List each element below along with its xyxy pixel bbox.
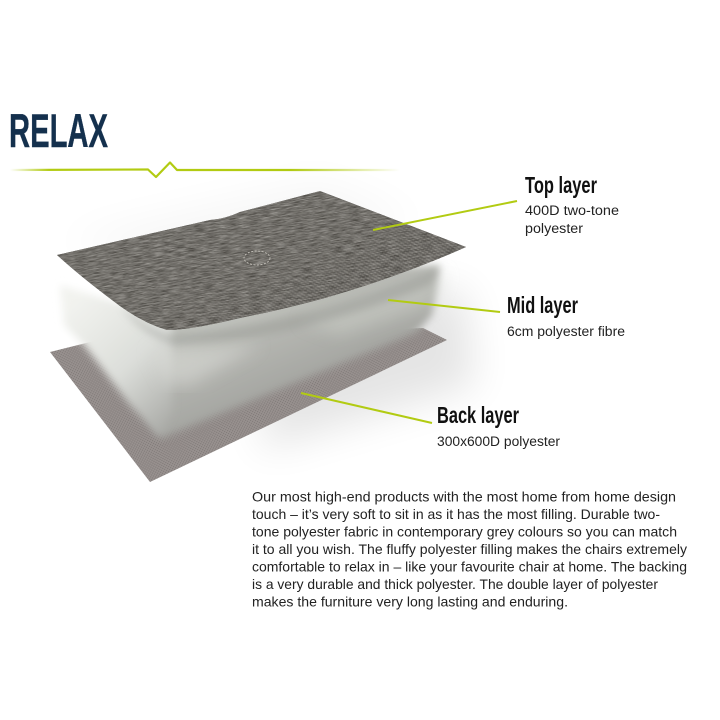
leader line: back layer [301, 393, 432, 423]
description text: Our most high-end products with the most home from home design [252, 490, 676, 505]
label: top layer: Top layer [525, 172, 597, 198]
title: RELAX [9, 104, 108, 157]
label: back layer: Back layer [437, 402, 519, 428]
layered material illustration [50, 191, 466, 482]
top layer stitched circle [244, 251, 270, 265]
shadow beneath top layer [120, 268, 440, 345]
label: top layer: 400D two-tone [525, 203, 619, 218]
label: mid layer: 6cm polyester fibre [507, 324, 625, 339]
label: top layer [525, 172, 619, 236]
description text: makes the furniture very long lasting and enduring. [252, 595, 568, 610]
label: mid layer: Mid layer [507, 292, 578, 318]
leader line: top layer [373, 201, 517, 230]
description text: it to all you wish. The fluffy polyester filling makes the chairs extremely [252, 542, 687, 557]
description text: comfortable to relax in – like your favourite chair at home. The backing [252, 560, 687, 575]
label: back layer [437, 402, 561, 449]
label: mid layer [507, 292, 625, 339]
top layer fabric [57, 191, 466, 330]
mid layer foam block [60, 265, 446, 438]
label: back layer: 300x600D polyester [437, 434, 561, 449]
back layer fabric [50, 328, 447, 482]
description text: tone polyester fabric in contemporary grey colours so you can match [252, 525, 677, 540]
label: top layer: polyester [525, 221, 584, 236]
infographic canvas [10, 114, 687, 610]
leader line: mid layer [388, 300, 500, 312]
description text: is a very durable and thick polyester. The double layer of polyester [252, 577, 658, 592]
soft background shadow [60, 180, 475, 450]
description text: touch – it’s very soft to sit in as it has the most filling. Durable two- [252, 507, 660, 522]
description text [252, 490, 687, 610]
green divider with zigzag [10, 162, 400, 177]
